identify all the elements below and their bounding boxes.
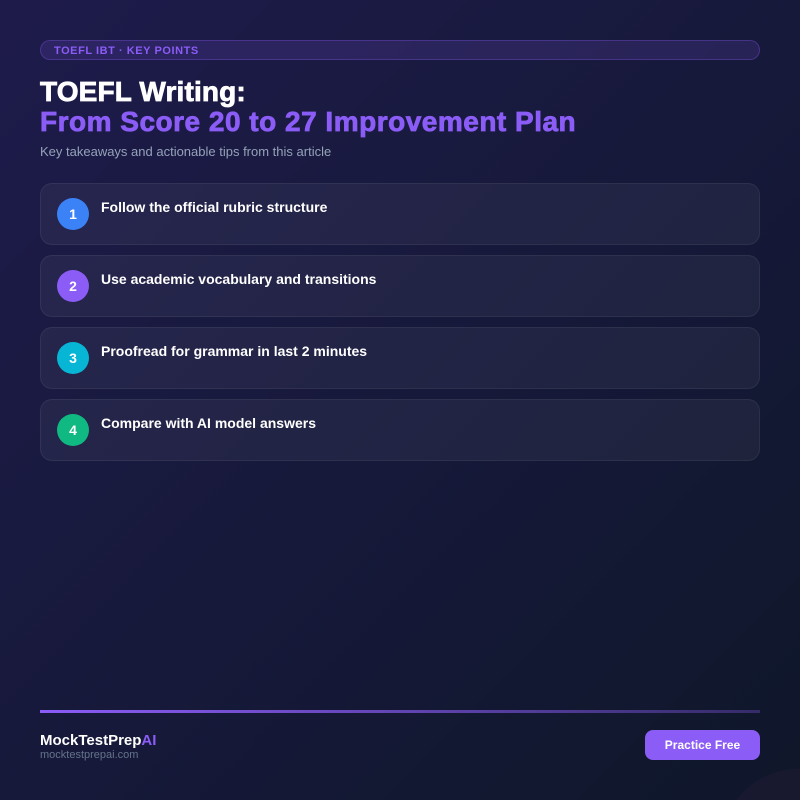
number badge 2 <box>57 270 89 302</box>
panel: key point 3 <box>40 327 760 389</box>
decorative corner glow <box>700 760 800 800</box>
footer gradient rule <box>40 710 760 713</box>
key point 1 text: Follow the official rubric structure <box>101 199 327 215</box>
key point 4 text: Compare with AI model answers <box>101 415 316 431</box>
brand name: MockTestPrepAI <box>40 732 156 749</box>
number badge 4: 4 <box>69 422 77 438</box>
panel: key point 1 <box>40 183 760 245</box>
number badge 3: 3 <box>69 350 77 366</box>
key point 2 text: Use academic vocabulary and transitions <box>101 271 376 287</box>
call to action button: Practice Free <box>665 738 740 752</box>
panel: key point 2 <box>40 255 760 317</box>
number badge 4 <box>57 414 89 446</box>
call to action button <box>645 730 760 760</box>
key point 3 text: Proofread for grammar in last 2 minutes <box>101 343 367 359</box>
badge label: TOEFL IBT · KEY POINTS <box>54 45 199 57</box>
badge: category pill <box>40 40 760 60</box>
title <box>40 76 576 138</box>
number badge 1: 1 <box>69 206 77 222</box>
title: TOEFL Writing: <box>40 76 246 107</box>
number badge 3 <box>57 342 89 374</box>
number badge 1 <box>57 198 89 230</box>
title: From Score 20 to 27 Improvement Plan <box>40 106 576 137</box>
brand block <box>40 732 156 761</box>
panel: key point 4 <box>40 399 760 461</box>
number badge 2: 2 <box>69 278 77 294</box>
subtitle: Key takeaways and actionable tips from this article <box>40 144 331 159</box>
brand url: mocktestprepai.com <box>40 749 138 761</box>
